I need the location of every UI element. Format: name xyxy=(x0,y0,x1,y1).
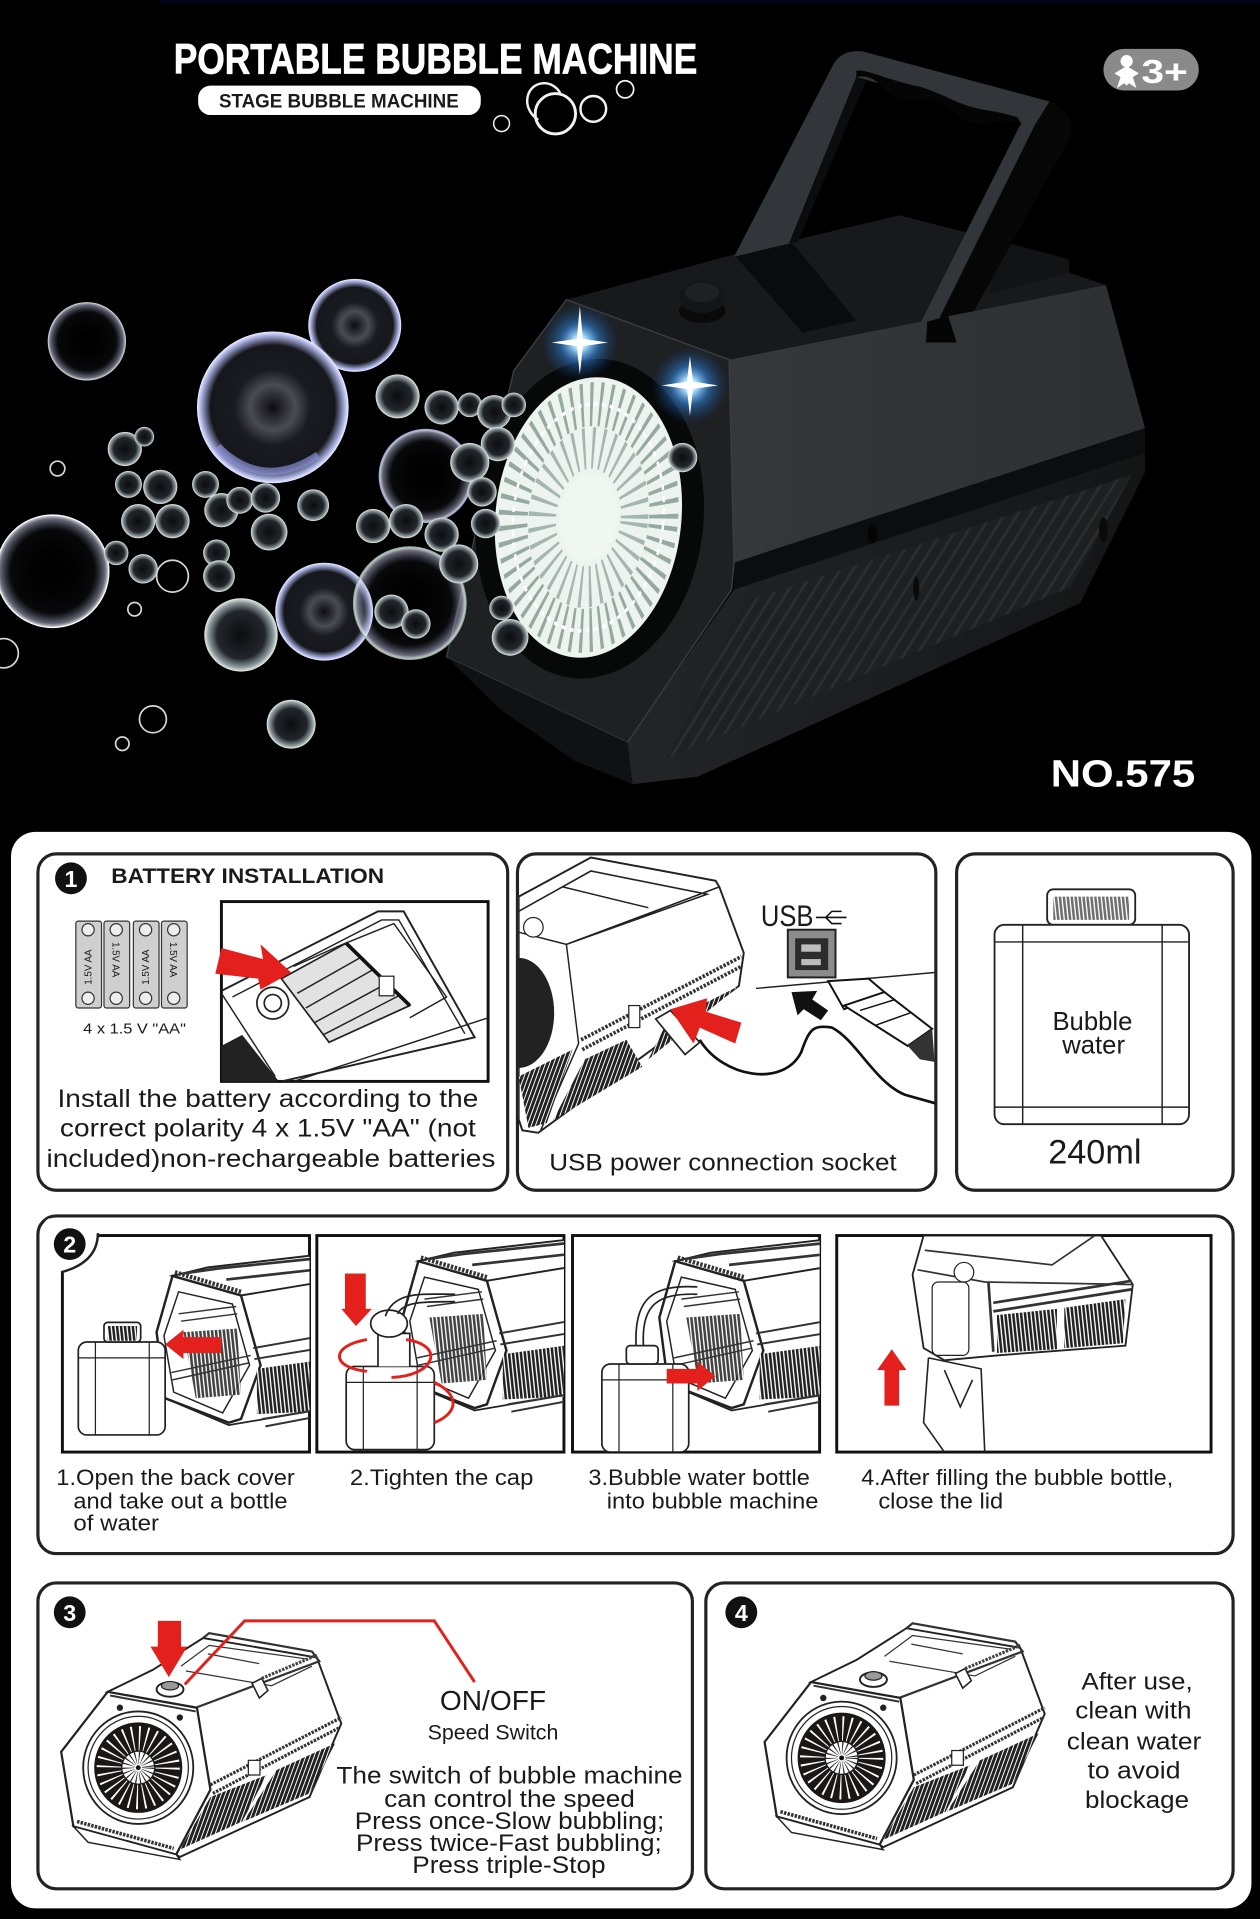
panel: USB power xyxy=(483,854,936,1190)
arrow: red down xyxy=(341,1273,372,1326)
frame 1 open back cover xyxy=(62,1236,336,1452)
fan xyxy=(481,368,696,667)
side band xyxy=(734,428,1145,590)
step captions: 2.Tighten the cap xyxy=(350,1465,533,1490)
switch label: Speed Switch xyxy=(428,1721,558,1745)
battery caption: 4 x 1.5 V "AA" xyxy=(83,1022,186,1038)
frame 3 insert bottle xyxy=(573,1236,839,1452)
subtitle pill: STAGE BUBBLE MACHINE xyxy=(219,91,459,113)
cleaning text xyxy=(1067,1668,1201,1814)
machine line art with USB cable xyxy=(483,858,936,1133)
cleaning text: clean water xyxy=(1067,1728,1201,1755)
outline bubbles xyxy=(0,461,188,750)
arrow: black up to socket xyxy=(791,991,828,1020)
arrow: red right xyxy=(667,1362,716,1391)
instructions text: correct polarity 4 x 1.5V "AA" (not xyxy=(60,1114,476,1142)
frame 4 close lid xyxy=(837,1236,1211,1452)
bottle label xyxy=(1052,1008,1132,1059)
age badge 3+: 3+ xyxy=(1141,53,1188,90)
step captions: of water xyxy=(73,1510,160,1535)
title: PORTABLE BUBBLE MACHINE xyxy=(174,35,697,83)
product photo: bubble machine xyxy=(447,51,1145,784)
switch instructions: Press twice-Fast bubbling; xyxy=(356,1830,662,1857)
arrow: red up xyxy=(877,1349,906,1406)
step badge 1: 1 xyxy=(64,866,77,892)
step badge 2 xyxy=(40,1218,98,1272)
step captions xyxy=(56,1465,1173,1535)
top face xyxy=(566,215,1106,360)
white instructions panel xyxy=(11,832,1251,1908)
knob xyxy=(679,298,725,323)
bubbles cloud xyxy=(0,279,697,750)
switch instructions: Press once-Slow bubbling; xyxy=(355,1808,664,1835)
USB socket label: USB xyxy=(761,900,813,933)
age badge 3+ xyxy=(1103,49,1199,91)
panel: battery installation xyxy=(38,854,508,1190)
icon: USB socket xyxy=(788,930,836,977)
switch instructions xyxy=(336,1763,683,1879)
frame 2 tighten cap xyxy=(317,1236,582,1452)
step captions: and take out a bottle xyxy=(73,1488,287,1513)
leader line to switch xyxy=(185,1621,475,1684)
arrow: red to socket xyxy=(670,998,741,1043)
front face xyxy=(447,300,734,743)
switch label: ON/OFF xyxy=(440,1685,546,1716)
cleaning text: to avoid xyxy=(1088,1758,1180,1785)
panel: step 3 speed switch xyxy=(38,1583,692,1889)
step badge 4 xyxy=(725,1596,757,1628)
step badge 4: 4 xyxy=(735,1600,748,1626)
step badge 3: 3 xyxy=(63,1600,76,1626)
cleaning text: After use, xyxy=(1081,1668,1193,1695)
icon: four AA batteries: 1.5V AA xyxy=(84,949,95,985)
large bubbles xyxy=(0,279,472,749)
side upper xyxy=(729,285,1145,563)
step captions: 4.After filling the bubble bottle, xyxy=(861,1465,1173,1490)
LED stars xyxy=(541,303,619,382)
switch instructions: The switch of bubble machine xyxy=(336,1763,683,1790)
step captions: close the lid xyxy=(878,1488,1003,1513)
switch instructions: Press triple-Stop xyxy=(412,1852,606,1879)
panel: step 2 bottle filling xyxy=(38,1216,1233,1554)
step captions: 1.Open the back cover xyxy=(56,1465,295,1490)
icon: four AA batteries xyxy=(76,921,187,1008)
subtitle pill xyxy=(198,86,481,115)
switch label xyxy=(428,1685,558,1745)
step captions: into bubble machine xyxy=(607,1488,818,1513)
step badge 3 xyxy=(54,1596,86,1628)
step captions: 3.Bubble water bottle xyxy=(588,1465,810,1490)
side lower xyxy=(628,453,1145,784)
heading: BATTERY INSTALLATION xyxy=(111,865,384,888)
step badge 1 xyxy=(55,862,87,894)
bottle label: Bubble xyxy=(1052,1008,1132,1036)
step badge 2: 2 xyxy=(63,1232,76,1258)
icon: four AA batteries: 1.5V AA xyxy=(141,949,152,985)
icon: four AA batteries: 1.5V AA xyxy=(110,942,121,978)
cleaning text: clean with xyxy=(1075,1698,1191,1725)
icon: small bubble outlines xyxy=(494,81,634,134)
model number: NO.575 xyxy=(1051,754,1195,796)
handle xyxy=(734,51,1072,343)
icon: bottle xyxy=(995,889,1189,1124)
instructions text: Install the battery according to the xyxy=(57,1085,478,1113)
small bubbles xyxy=(104,374,697,656)
inset: battery compartment xyxy=(221,902,488,1081)
arrow: red to compartment xyxy=(215,944,291,990)
bottle label: water xyxy=(1061,1031,1125,1059)
icon: four AA batteries: 1.5V AA xyxy=(167,942,178,978)
arrow: red twist xyxy=(339,1340,453,1423)
USB caption: USB power connection socket xyxy=(549,1150,897,1177)
instructions text xyxy=(46,1085,495,1173)
panel: step 4 cleaning xyxy=(706,1583,1233,1889)
instructions text: included)non-rechargeable batteries xyxy=(46,1145,495,1173)
machine line art xyxy=(61,1633,341,1859)
bottle volume: 240ml xyxy=(1048,1133,1142,1171)
cleaning text: blockage xyxy=(1085,1787,1189,1814)
icon: USB plug xyxy=(828,979,935,1062)
arrow: red left xyxy=(165,1330,221,1359)
switch instructions: can control the speed xyxy=(384,1786,635,1813)
arrow: red press xyxy=(150,1621,187,1677)
machine line art xyxy=(765,1623,1045,1850)
panel: bubble water bottle xyxy=(957,854,1233,1190)
